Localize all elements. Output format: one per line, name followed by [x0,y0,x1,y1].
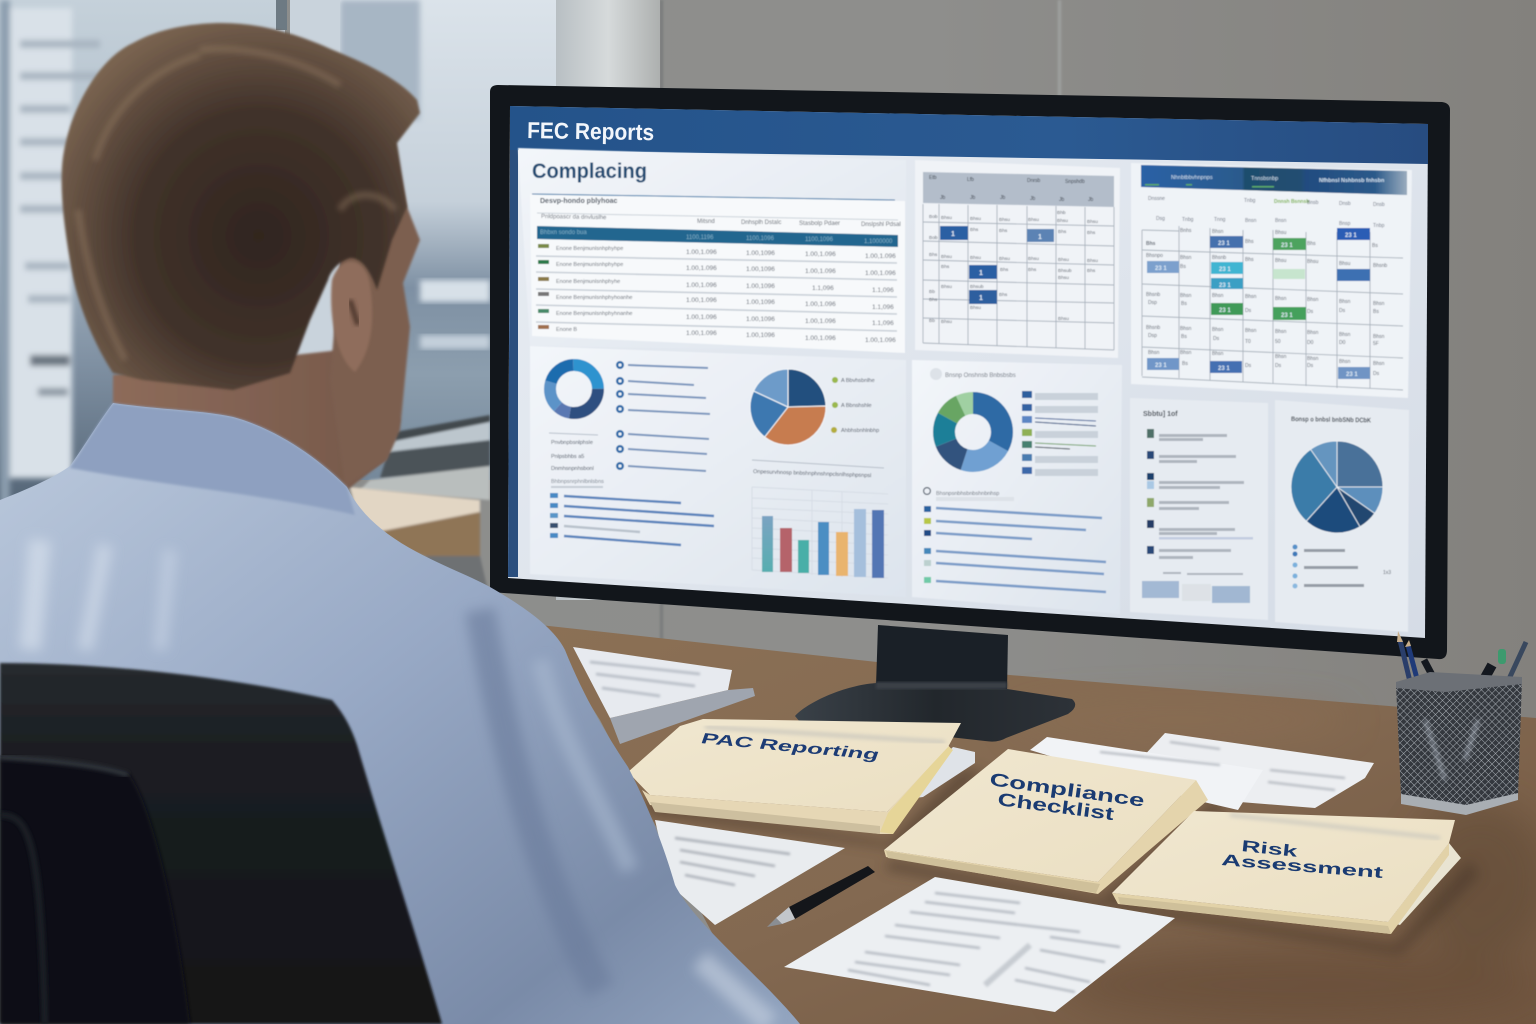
calendar header: Lfb [967,177,974,183]
calendar cell text: Bhsu [1058,275,1069,281]
large calendar legend row: Tnbg [1244,198,1256,204]
folder: Risk Assessment [1112,811,1461,934]
large calendar events: 23 1 [1346,372,1358,378]
calendar header: Jb [1059,197,1064,203]
large calendar cell text: Bhsnb [1146,292,1160,298]
large calendar cell text: Bhsn [1339,299,1351,305]
large calendar events: 23 1 [1219,267,1231,273]
calendar header: Jb [1030,196,1036,202]
large calendar cell text: D0 [1339,340,1346,346]
window sill [360,415,490,500]
calendar cell text: Bob [929,214,938,220]
large calendar cell text: Bhsn [1180,293,1192,299]
large calendar cell text: D0 [1307,340,1314,346]
table rows: 1.00,1.096 [686,249,717,256]
folder label: Risk [1241,838,1298,861]
calendar grid [923,204,1114,350]
calendar cell text: Bhb [1057,210,1066,216]
large calendar legend row: Bnsp [1339,221,1351,227]
window with city view [0,0,660,600]
donut chart [550,365,598,413]
data table: Dnslpshl Pdsal [861,222,901,228]
paper under the man's arm [655,820,845,925]
calendar header [923,172,1114,207]
large calendar cell text: Bnhs [1180,228,1192,234]
data table: Dnhsplh Dstalc [741,220,781,226]
large calendar legend row: Bnsn [1275,218,1287,224]
table rows: Enone Benjmunlsnhphyhe [556,279,620,285]
table rows: 1.00,1096 [746,332,775,339]
large calendar events: 23 1 [1155,266,1167,272]
large calendar cell text: Bhs [1245,257,1254,263]
desk [540,625,1536,1024]
large calendar cell text: Bhsn [1373,334,1385,340]
title: FEC Reports: FEC Reports [527,117,654,145]
large calendar legend row: Dnsb [1373,202,1385,208]
neck [113,350,400,490]
top right papers [1030,733,1374,810]
calendar cell text: Bhs [941,264,950,270]
data table: Stasbolp Pdaer [799,221,840,227]
large calendar cell text: Bhsnpo [1146,253,1163,259]
table rows: Enone Benjmunlsnhphyhnanhe [556,311,632,317]
calendar cell text: Bhsu [970,255,981,261]
pie chart [1291,441,1383,533]
large calendar events: 23 1 [1281,313,1293,319]
calendar cell text: Bhs [929,297,938,303]
large calendar events [1147,228,1370,379]
table rows: 1.00,1.096 [805,335,836,342]
large calendar cell text: 50 [1275,339,1281,345]
face side [330,150,420,487]
pie notes: 1x3 [1383,570,1391,576]
table rows: Enone Benjmunlsnhphyhoanhe [556,295,632,301]
pen cup [1396,631,1526,815]
large calendar cell text: Bhsn [1373,301,1385,307]
table rows: 1.00,1.096 [865,270,896,277]
folder label: Checklist [996,789,1115,824]
left paper stack [573,647,755,744]
calendar cell text: Bhsu [999,256,1010,262]
calendar header: Snpshdb [1065,179,1085,185]
calendar cell text: Bhsu [1058,257,1069,263]
pie legend: A Bbvhsbnlhe [841,378,875,384]
table rows: 1.00,1.096 [805,268,836,275]
left small text block [549,433,604,488]
header bar with title [510,106,1428,164]
table rows: 1.00,1.096 [805,301,836,308]
panel: doughnut with legend [912,360,1122,614]
horizontal bar list [550,493,714,545]
hair highlights [78,49,395,360]
large calendar cell text: Bhsn [1180,326,1192,332]
data table: 1100,1096 [746,236,775,242]
large calendar cell text: Ds [1245,308,1252,314]
large calendar legend row: Dnsb [1339,201,1351,207]
data table: Desvp-hondo pblyhoac [540,198,618,205]
large calendar cell text: Bhsn [1307,330,1319,336]
calendar cell text: Bhs [970,227,979,233]
large calendar cell text: Bs [1372,243,1378,249]
large calendar cell text: Bhsn [1212,293,1224,299]
calendar cell text: Bhsu [1058,316,1069,322]
large calendar legend row: Dsg [1156,216,1165,222]
calendar header: Dnrsb [1027,178,1041,184]
calendar cell text: Bhsu [941,319,952,325]
table rows: 1.1,096 [872,304,894,311]
large calendar events: 23 1 [1218,366,1230,372]
panel: small calendar [915,160,1120,358]
monitor [490,85,1450,659]
calendar cell text: Bhsub [1058,268,1072,274]
large calendar events: 23 1 [1345,233,1357,239]
calendar header: Etb [929,175,937,181]
table rows: 1.00,1096 [746,250,775,257]
pie legend: A Bbnshshle [841,403,872,409]
table rows: 1.00,1096 [746,266,775,273]
bullet list: Bhsnpsnbhsbnbshnbnhsp [936,491,999,497]
data table: Pnldpoascr da dnvluslhe [541,214,607,221]
wall panel seam [660,0,1061,640]
large calendar legend row: Tnng [1214,217,1226,223]
large calendar events: 23 1 [1155,363,1167,369]
pie chart [750,369,826,445]
panel: pie with notes [1275,400,1409,632]
large calendar cell text: Ds [1307,309,1314,315]
large calendar cell text: Bhsn [1307,356,1319,362]
large calendar cell text: Bhsn [1245,328,1257,334]
large calendar cell text: Ds [1307,363,1314,369]
large calendar cell text: Bhsn [1275,329,1287,335]
large calendar cell text [1146,228,1387,377]
large calendar cell text: Bs [1180,264,1186,270]
pie legend: Ahbhsbnhlnbhp [841,428,879,434]
data table: 1100,1196 [686,235,714,241]
calendar cell text: Bhsu [970,216,981,222]
mesh holder [1396,680,1522,806]
large calendar header: Nfhbnsl Nshbnsb fnhsbn [1319,178,1385,184]
large calendar cell text: Bhsu [1275,230,1287,236]
large calendar cell text: Dsp [1148,333,1157,339]
folder label: Compliance [988,769,1146,811]
left small text block: Pnvbnpbsnlphsle [551,440,593,446]
panel heading: Bnsnp Onshnsb Bnbsbsbs [945,373,1016,379]
man [0,23,800,1024]
calendar cell text: Bhsu [999,217,1010,223]
table rows: 1.00,1.096 [865,253,896,260]
large calendar cell text: Bhsn [1339,332,1351,338]
large calendar events: 23 1 [1218,241,1230,247]
large calendar cell text: Bhsn [1180,350,1192,356]
calendar cell text: Bhsu [1087,258,1098,264]
large calendar cell text: Bhsu [1275,258,1287,264]
monitor bezel [490,85,1450,659]
left small text block: Dnmhsnpnhsbonl [551,466,594,472]
large calendar cell text: Bhsn [1339,359,1351,365]
large calendar cell text: Bhs [1146,241,1156,247]
calendar cell text: Bhsu [1057,218,1068,224]
table rows: 1.00,1.096 [686,314,717,321]
large calendar legend row: Bnsb [1307,200,1319,206]
large calendar legend row [1148,196,1385,229]
large calendar cell text: T0 [1245,339,1251,345]
large calendar header: Tnnsbsnbp [1251,176,1278,182]
large calendar grid [1142,226,1403,390]
large calendar header [1141,165,1407,195]
large calendar cell text: 5F [1373,341,1379,347]
table rows: 1.1,096 [872,320,894,327]
folder label: Assessment [1221,852,1385,882]
table rows: Enone Benjmunlsnhphyhpe [556,246,623,252]
data table [530,194,905,353]
large calendar cell text: Bhs [1307,241,1316,247]
pie legend [831,377,879,434]
large calendar cell text: Bhsnb [1146,325,1160,331]
large calendar legend row: Tnbg [1182,217,1194,223]
pie heading: Bonsp o bnbsl bnbSNb DCbK [1291,416,1371,424]
shirt [0,403,800,1024]
calendar event cells [940,226,1054,304]
large calendar cell text: Bhsu [1307,259,1319,265]
calendar event cells: 1 [979,295,983,302]
table rows: 1.00,1.096 [686,330,717,337]
table rows: 1.00,1.096 [686,282,717,289]
calendar cell text: Bhsu [1028,217,1039,223]
calendar cell text: Bhs [1058,229,1067,235]
calendar header: Jb [940,195,946,201]
calendar cell text: Bob [929,235,938,241]
desk wood shading [1010,704,1536,1021]
calendar cell text [929,210,1098,325]
calendar cell text: Bhs [999,292,1008,298]
large calendar legend row: Tnbp [1373,223,1385,229]
calendar cell text: Bhsu [941,215,952,221]
heading: Complacing: Complacing [532,160,647,183]
doughnut chart [944,403,1002,461]
table header row [537,226,898,247]
panel: donut, pie and bar charts [530,346,906,597]
calendar cell text: Bhsub [970,284,984,290]
calendar header: Jb [1088,197,1094,203]
large calendar cell text: Bhsn [1180,255,1192,261]
calendar cell text: Bhs [1028,267,1037,273]
large calendar cell text: Bhsn [1245,294,1257,300]
bullet list [924,488,1106,592]
large calendar cell text: Bhsn [1307,297,1319,303]
list heading: Sbbtu] 1of [1143,411,1178,418]
monitor stand [795,625,1075,742]
folder label [1221,838,1385,882]
calendar cell text: Bhsu [941,284,952,290]
pie notes [1292,544,1391,588]
large calendar cell text: Bhsn [1212,351,1224,357]
large calendar cell text: Ds [1245,363,1252,369]
pens [1397,631,1526,692]
large calendar cell text: Bhsn [1373,361,1385,367]
panel: compliance table [518,148,906,353]
hair [62,23,420,390]
calendar cell text: Bhsu [1087,219,1098,225]
calendar cell text: Bhs [1087,230,1096,236]
folder label [988,769,1146,824]
panel: list with buttons [1130,398,1268,620]
large calendar cell text: Bhsn [1212,327,1224,333]
table rows: 1.00,1096 [746,283,775,290]
large calendar cell text: Bhsn [1275,296,1287,302]
calendar cell text: Bhsu [970,305,981,311]
large calendar legend row: Dnssne [1148,196,1165,202]
buttons [1142,581,1250,603]
left small text block: Bhbnpsnrphnlbnlsbns [551,479,604,485]
table rows: 1.1,096 [872,287,894,294]
large calendar legend row: Bnsn [1245,218,1257,224]
table rows: 1.00,1.096 [686,265,717,272]
folder: PAC Reporting [628,719,975,834]
large calendar header: Nhnbtbbvhnpnps [1171,175,1213,181]
pen on desk [767,866,875,927]
calendar cell text: Bhs [1087,268,1096,274]
collar [70,403,355,515]
large calendar cell text: Bs [1373,309,1379,315]
large calendar cell text: Bhsn [1275,354,1287,360]
large calendar events: 23 1 [1281,243,1293,249]
calendar event cells: 1 [979,270,983,277]
large calendar cell text: Dsp [1148,300,1157,306]
large calendar cell text: Bhsnb [1212,255,1226,261]
data table: Mitsnd [697,219,715,225]
bar chart: Onpesurvhnosp bnbshnphnshnpclsnlhsphpsnpsl [753,469,871,479]
doughnut legend [1022,391,1098,476]
calendar event cells: 1 [1038,234,1042,241]
calendar cell text: Bhs [929,252,938,258]
large calendar events: 23 1 [1219,308,1231,314]
data table: 1,1000000 [864,239,893,245]
large calendar cell text: Ds [1339,308,1346,314]
screen left edge [508,148,518,577]
table rows: 1.00,1096 [746,299,775,306]
panel heading [930,368,1016,380]
left small text block: Pnlpsbhbs a5 [551,454,584,460]
shirt folds [30,540,770,1024]
large calendar cell text: Ds [1275,363,1282,369]
large calendar legend row: Dnnsh Bsnnsh [1274,199,1309,205]
large calendar events: 23 1 [1219,283,1231,289]
chair [0,663,442,1024]
panel: large calendar [1131,163,1412,398]
table rows: 1.00,1.096 [686,297,717,304]
large calendar cell text: Bhs [1245,239,1254,245]
calendar header: Jb [970,195,976,201]
large calendar cell text: Ds [1213,336,1220,342]
table rows: 1.1,096 [812,285,834,292]
large calendar cell text: Bs [1181,334,1187,340]
folder shadows on desk [640,770,1480,955]
large calendar cell text: Bhsn [1148,350,1160,356]
calendar cell text: Bb [929,289,935,295]
folder: Compliance Checklist [884,749,1208,894]
chair padding [0,757,190,1024]
large calendar cell text: Bs [1182,361,1188,367]
calendar cell text: Bhsu [1028,256,1039,262]
table rows: 1.00,1096 [746,316,775,323]
calendar cell text: Bhs [1000,267,1009,273]
screen background [508,106,1428,638]
table rows: Enone B [556,327,577,333]
list items [1147,429,1253,575]
table rows [538,244,896,344]
calendar event cells: 1 [951,231,955,238]
bar chart [752,460,888,578]
large calendar cell text: Bhsu [1339,261,1351,267]
legend list [617,362,710,471]
calendar cell text: Bhs [999,228,1008,234]
data table: Bhbxn sondo bua [540,230,587,236]
distant tower [0,0,100,520]
ear [331,262,372,372]
large calendar cell text: Bhsn [1212,229,1224,235]
table rows: Enone Benjmunlsnhphyhpe [556,262,623,268]
large calendar cell text: Bs [1181,301,1187,307]
table rows: 1.00,1.096 [805,251,836,258]
calendar cell text: Bb [929,318,935,324]
table rows: 1.00,1.096 [865,337,896,344]
calendar cell text: Bhsu [941,254,952,260]
large calendar cell text: Ds [1373,371,1380,377]
papers inside folder [900,747,975,800]
wooden shelf behind the man [350,487,490,600]
table rows: 1.00,1.096 [805,318,836,325]
data table: 1100,1096 [805,237,834,243]
large calendar cell text: Bhsnb [1373,263,1387,269]
folder label: PAC Reporting [699,731,882,764]
calendar header: Jb [1000,195,1006,201]
bottom paper [784,877,1175,1012]
